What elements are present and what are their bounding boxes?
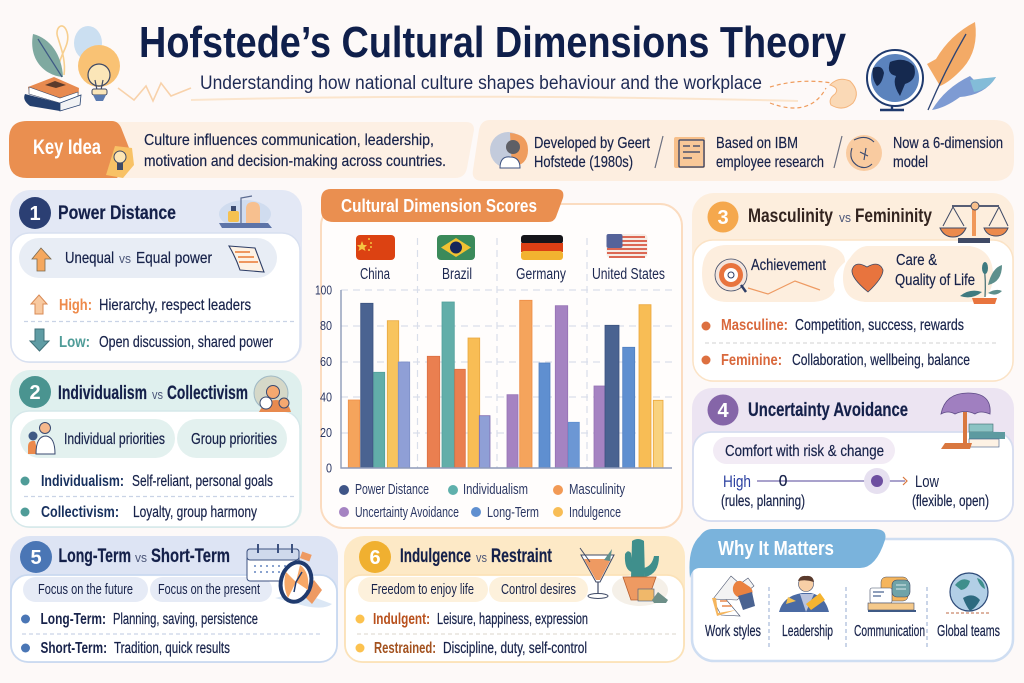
y axis labels: 80 (320, 319, 332, 333)
fact: developed by (534, 135, 650, 171)
bars: United States (594, 305, 663, 468)
bar chart (348, 300, 663, 468)
fact: developed by: Hofstede (1980s) (534, 154, 633, 171)
heading: long-term vs short-term: Short-Term (151, 546, 230, 567)
panel 6 background (344, 536, 685, 663)
heading: masculinity vs femininity: Femininity (855, 206, 932, 227)
badge 5 (20, 541, 52, 573)
pill: group priorities: Group priorities (191, 431, 277, 448)
icon: folders and documents (712, 576, 755, 616)
icon: institution (219, 196, 272, 228)
pill: focus on the future: Focus on the future (38, 582, 133, 598)
icon: globe and leaves (770, 22, 996, 110)
row: restrained (356, 640, 587, 657)
title: Hofstede’s Cultural Dimensions Theory (139, 18, 846, 67)
pill text: Unequal (65, 250, 114, 267)
country labels: Germany (516, 266, 566, 283)
pill: focus on the present (150, 577, 272, 602)
fact: IBM research: Based on IBM (716, 135, 798, 152)
panel 5 background (10, 536, 338, 663)
row: low (30, 329, 274, 351)
y axis labels: 40 (320, 390, 332, 404)
pill: control desires (489, 577, 588, 602)
y axis labels: 100 (315, 284, 332, 298)
pill: focus on the future (23, 577, 148, 602)
scale: high to low: 0 (779, 473, 788, 490)
key idea text (144, 132, 446, 170)
panel: individualism vs collectivism (10, 370, 302, 528)
badge 2 (19, 376, 51, 408)
row: restrained: Discipline, duty, self-control (443, 640, 587, 657)
flag: China (356, 235, 395, 260)
panel 1 content area (11, 233, 300, 362)
pill: comfort with risk (713, 437, 895, 464)
icon: cocktail glass (580, 548, 614, 598)
heading: power distance: Power Distance (58, 203, 176, 224)
heading: long-term vs short-term: vs (135, 550, 147, 565)
icon: world globe (946, 573, 989, 613)
row: restrained: Restrained: (374, 640, 436, 657)
heading: long-term vs short-term: Long-Term (58, 546, 131, 567)
pill: care and quality of life: Quality of Life (895, 272, 975, 289)
country labels (360, 266, 665, 283)
panel 2 content area (11, 411, 300, 527)
row: collectivism (20, 504, 257, 521)
icon: business leader (779, 576, 829, 612)
row: long-term (21, 611, 258, 628)
chart heading tab (321, 189, 563, 222)
row: long-term: Planning, saving, persistence (113, 611, 258, 628)
panel: uncertainty avoidance (692, 388, 1014, 522)
y axis labels: 0 (326, 462, 332, 476)
heading: uncertainty avoidance: Uncertainty Avoidance (748, 400, 908, 421)
row: masculine: Masculine: (721, 317, 788, 334)
chart legend (339, 482, 626, 521)
panel 4 content area (693, 432, 1013, 521)
icon: books, leaf and light bulb (24, 26, 191, 111)
row: high (31, 295, 251, 314)
heading: masculinity vs femininity (748, 206, 932, 227)
row: high: Hierarchy, respect leaders (99, 297, 251, 314)
row: individualism (20, 473, 273, 490)
row: low: Low: (59, 334, 90, 351)
y axis labels: 60 (320, 355, 332, 369)
pill text: vs (119, 251, 131, 266)
scale: high to low: High (723, 472, 751, 491)
panel: power distance (10, 190, 302, 363)
icon: calendar and stopwatch (247, 544, 332, 608)
pill: focus on the present: Focus on the present (158, 582, 260, 598)
fact: IBM research: employee research (716, 154, 824, 171)
icon: potted plant (960, 262, 1002, 304)
item: global teams (937, 573, 1000, 640)
pill: freedom to enjoy life (358, 577, 488, 602)
row: indulgent: Leisure, happiness, expression (437, 611, 588, 628)
key idea tab (9, 121, 133, 178)
row: long-term: Long-Term: (40, 611, 106, 628)
icon: person (490, 132, 528, 168)
row: indulgent (356, 611, 588, 628)
panel 1 background (10, 190, 302, 363)
pill text (65, 250, 213, 267)
scale: high to low: (flexible, open) (912, 493, 989, 510)
heading: indulgence vs restraint: Indulgence (400, 546, 471, 567)
icon: checklist paper (229, 246, 264, 272)
heading: individualism vs collectivism: Individualism (58, 383, 147, 404)
item: leadership (779, 576, 833, 640)
badge 4 (708, 394, 738, 426)
icon: up arrow (32, 248, 51, 271)
chart legend: Power Distance (355, 482, 429, 498)
chart legend: Long-Term (487, 505, 539, 521)
panel 6 content area (345, 575, 684, 662)
facts background (473, 120, 1014, 181)
row: feminine: Feminine: (721, 352, 782, 369)
fact: IBM research (716, 135, 824, 171)
heading: why it matters: Why It Matters (718, 538, 834, 560)
banner: key idea (9, 121, 474, 178)
fact: developed by: Developed by Geert (534, 135, 650, 152)
country labels: United States (592, 266, 665, 283)
chart legend: Uncertainty Avoidance (355, 505, 459, 521)
chart panel frame (321, 204, 682, 528)
bars: Brazil (427, 302, 490, 468)
flag: United States (606, 234, 648, 258)
icon: note with bulb (106, 146, 134, 178)
scale: high to low (721, 468, 989, 510)
icon: speech bubbles and laptop (868, 577, 916, 611)
y axis labels: 20 (320, 426, 332, 440)
row: short-term: Tradition, quick results (114, 640, 230, 657)
pill: unequal vs equal (19, 238, 277, 278)
panel: indulgence vs restraint (344, 536, 685, 663)
bars: China (348, 303, 410, 468)
panel frame (692, 539, 1013, 661)
bars: Germany (507, 300, 579, 468)
badge 3: 3 (717, 207, 729, 229)
panel 5 content area (11, 575, 337, 662)
heading: individualism vs collectivism (58, 383, 248, 404)
icon: document (674, 137, 705, 168)
row: short-term: Short-Term: (40, 640, 107, 657)
badge 3 (708, 202, 738, 232)
heading: individualism vs collectivism: vs (152, 387, 163, 402)
y axis labels (315, 284, 332, 476)
panel: why it matters (689, 529, 1013, 661)
pill: group priorities (177, 419, 287, 458)
key idea text: motivation and decision-making across countries. (144, 153, 446, 170)
pill text: Equal power (136, 250, 213, 267)
row: collectivism: Collectivism: (41, 504, 119, 521)
scale: high to low: Low (915, 472, 940, 491)
heading: indulgence vs restraint (400, 546, 552, 567)
panel: masculinity vs femininity (692, 193, 1014, 382)
row: low: Open discussion, shared power (99, 334, 274, 351)
row: collectivism: Loyalty, group harmony (133, 504, 257, 521)
row: high: High: (59, 297, 92, 314)
heading tab (689, 529, 886, 578)
row: masculine: Competition, success, rewards (795, 317, 964, 334)
pill: individual priorities (20, 419, 175, 458)
row: feminine: Collaboration, wellbeing, balance (792, 352, 970, 369)
row: short-term (21, 640, 230, 657)
panel 2 background (10, 370, 302, 528)
item: communication: Communication (854, 623, 925, 640)
icon: cactus (612, 539, 668, 606)
pill: care and quality of life: Care & (896, 252, 937, 269)
key idea text: Culture influences communication, leadership, (144, 132, 434, 149)
panel 3 background (692, 193, 1014, 382)
fact: six dimensions (893, 135, 1003, 171)
subtitle: Understanding how national culture shapes behaviour and the workplace (200, 73, 762, 94)
chart legend: Indulgence (569, 505, 621, 521)
item: work styles (705, 576, 761, 640)
pill: comfort with risk: Comfort with risk & change (725, 443, 884, 460)
icon: umbrella and books (941, 393, 1005, 449)
pill: individual priorities: Individual priorities (64, 431, 165, 448)
country labels: China (360, 266, 390, 283)
chart legend: Individualism (463, 482, 528, 498)
icon: balance scale (940, 202, 1008, 243)
row: feminine (702, 352, 970, 369)
heading: long-term vs short-term (58, 546, 230, 567)
pill: care and quality of life (843, 246, 1002, 304)
heading: indulgence vs restraint: Restraint (491, 546, 552, 567)
pill: achievement: Achievement (751, 257, 826, 274)
badge 6 (359, 541, 391, 573)
country labels: Brazil (442, 266, 472, 283)
flag: Germany (521, 235, 563, 260)
badge 4: 4 (717, 400, 729, 422)
pill: freedom to enjoy life: Freedom to enjoy life (371, 582, 474, 598)
badge 6: 6 (369, 547, 381, 569)
icon: six-dimension badge (846, 135, 882, 171)
panel 3 content area (693, 240, 1013, 381)
pill: control desires: Control desires (501, 582, 576, 598)
badge 1 (19, 197, 51, 229)
pill: achievement (702, 245, 845, 302)
item: leadership: Leadership (782, 623, 833, 640)
key idea background (116, 122, 474, 178)
subtitle underline (191, 97, 798, 101)
heading: individualism vs collectivism: Collectivism (167, 383, 248, 404)
row: indulgent: Indulgent: (373, 611, 430, 628)
banner: theory facts (473, 120, 1014, 181)
flag: Brazil (437, 235, 475, 260)
row: masculine (702, 317, 964, 334)
item: work styles: Work styles (705, 623, 761, 640)
heading: indulgence vs restraint: vs (476, 550, 487, 565)
heading: masculinity vs femininity: vs (839, 210, 851, 225)
chart legend: Masculinity (569, 482, 626, 498)
panel 4 background (692, 388, 1014, 522)
badge 5: 5 (30, 547, 42, 569)
chart heading: Cultural Dimension Scores (341, 196, 537, 216)
fact: six dimensions: model (893, 154, 928, 171)
badge 2: 2 (29, 382, 41, 404)
scale: high to low: (rules, planning) (721, 493, 805, 510)
row: individualism: Individualism: (41, 473, 124, 490)
key idea label: Key Idea (33, 136, 101, 159)
item: communication (854, 577, 925, 640)
panel: long-term vs short-term (10, 536, 338, 663)
icon: group of people (254, 376, 291, 412)
heading: masculinity vs femininity: Masculinity (748, 206, 833, 227)
row: individualism: Self-reliant, personal goals (132, 473, 273, 490)
panel: cultural dimension scores (315, 189, 682, 528)
badge 1: 1 (29, 203, 41, 225)
